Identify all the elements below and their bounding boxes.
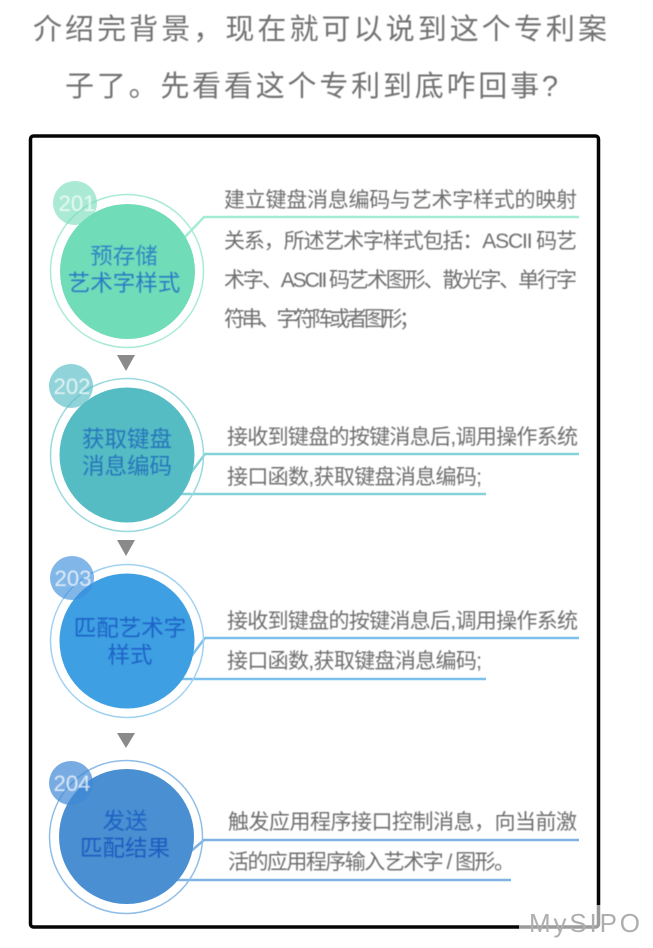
outer ring 203 (50, 564, 204, 718)
panel: flow frame (30, 136, 598, 927)
circle label 202 (82, 427, 172, 479)
description 202 (227, 426, 578, 489)
arrow 1 (117, 355, 135, 371)
circle label 202: 消息编码 (82, 454, 172, 479)
arrow 3 (117, 733, 135, 748)
circle label 204 (80, 809, 170, 861)
connector lines 202 (178, 454, 579, 494)
outer ring 201 (50, 194, 204, 348)
badge 203 (50, 556, 94, 600)
watermark: MySIPO (529, 908, 640, 938)
circle label 201: 艺术字样式 (68, 271, 180, 296)
circle label 203: 匹配艺术字 (74, 616, 186, 641)
connector lines 203 (178, 638, 579, 679)
heading: 子了。先看看这个专利到底咋回事? (65, 70, 558, 103)
badge 204: 204 (54, 771, 90, 796)
badge 204 (49, 761, 93, 805)
main circle 204 (59, 769, 194, 904)
connector lines 201 (184, 217, 579, 238)
description 204: 活的应用程序输入艺术字 / 图形。 (228, 851, 515, 874)
main circle 201 (60, 204, 195, 339)
badge 202 (49, 364, 93, 408)
circle label 202: 获取键盘 (82, 427, 172, 452)
description 201: 建立键盘消息编码与艺术字样式的映射 (224, 189, 577, 212)
description 201: 关系，所述艺术字样式包括：ASCII 码艺 (224, 230, 577, 253)
step 202 (49, 364, 579, 532)
description 203: 接收到键盘的按键消息后,调用操作系统 (227, 610, 578, 633)
circle label 203: 样式 (107, 643, 153, 668)
badge 203: 203 (54, 566, 92, 591)
description 202: 接口函数,获取键盘消息编码; (227, 466, 482, 489)
badge 202: 202 (54, 374, 90, 399)
description 201: 符串、字符阵或者图形； (224, 308, 420, 331)
outer ring 202 (50, 378, 204, 532)
description 201: 术字、ASCII 码艺术图形、散光字、单行字 (224, 269, 577, 292)
main circle 202 (60, 388, 194, 522)
step 204 (49, 760, 579, 914)
description 203: 接口函数,获取键盘消息编码; (227, 650, 482, 673)
circle label 201 (68, 244, 180, 296)
circle label 201: 预存储 (90, 244, 158, 269)
description 203 (227, 610, 578, 673)
circle label 204: 匹配结果 (80, 836, 170, 861)
circle label 204: 发送 (102, 809, 148, 834)
main circle 203 (60, 574, 194, 708)
step 201 (50, 181, 579, 348)
step 203 (50, 556, 579, 718)
description 204: 触发应用程序接口控制消息，向当前激 (228, 811, 577, 834)
circle label 203 (74, 616, 186, 668)
outer ring 204 (50, 760, 202, 914)
arrow 2 (117, 540, 135, 556)
description 204 (228, 811, 577, 874)
heading (33, 13, 607, 103)
badge 201: 201 (58, 191, 96, 216)
badge 201 (53, 181, 97, 225)
description 202: 接收到键盘的按键消息后,调用操作系统 (227, 426, 578, 449)
description 201 (224, 189, 577, 331)
heading: 介绍完背景，现在就可以说到这个专利案 (33, 13, 607, 46)
connector lines 204 (175, 840, 579, 880)
